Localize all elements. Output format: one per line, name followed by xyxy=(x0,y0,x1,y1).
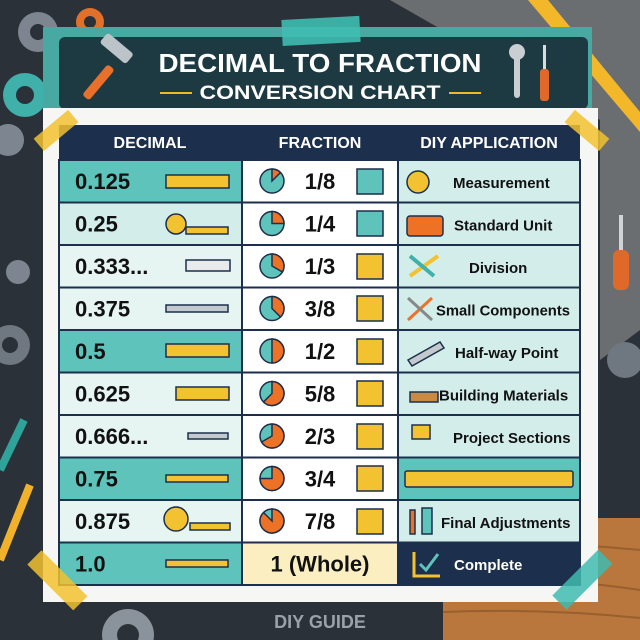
application labels: Final Adjustments xyxy=(441,515,570,532)
fractions: 1/4 xyxy=(305,212,336,236)
application labels: Small Components xyxy=(436,302,570,320)
pie charts xyxy=(260,169,284,533)
decimal values: 0.875 xyxy=(75,509,130,534)
title: DECIMAL TO FRACTION xyxy=(158,48,482,78)
decimal values: 0.333... xyxy=(75,254,148,279)
icon: wrench and screwdriver xyxy=(509,44,549,101)
decimal values: 0.5 xyxy=(75,339,106,364)
application labels: Division xyxy=(469,260,527,277)
application labels: Project Sections xyxy=(453,430,571,447)
table rows xyxy=(59,160,580,585)
decimal values: 0.75 xyxy=(75,466,118,492)
fractions xyxy=(270,169,370,576)
decimal values: 0.625 xyxy=(75,382,130,406)
application labels: Standard Unit xyxy=(454,218,552,234)
fractions: 1/3 xyxy=(305,254,335,279)
fractions: 2/3 xyxy=(305,424,335,449)
application icons xyxy=(405,171,573,576)
application labels: Complete xyxy=(454,557,522,574)
application labels xyxy=(436,175,571,574)
frame xyxy=(43,27,592,137)
tape: top xyxy=(281,16,361,46)
fraction square icons xyxy=(357,169,383,534)
table header: DECIMAL xyxy=(114,135,187,152)
title xyxy=(158,48,482,104)
decoration: tape measure ruler xyxy=(528,0,640,132)
decimal values xyxy=(75,169,148,576)
fractions: 3/4 xyxy=(305,466,336,492)
table header: DIY APPLICATION xyxy=(420,135,558,152)
application labels: Building Materials xyxy=(439,388,568,404)
decimal values: 0.666... xyxy=(75,424,148,449)
fractions: 1/2 xyxy=(305,339,335,364)
application labels: Measurement xyxy=(453,175,550,192)
tape: corners xyxy=(27,110,612,610)
table header: FRACTION xyxy=(279,135,361,152)
table header xyxy=(59,125,580,160)
decimal tool icons xyxy=(164,175,230,567)
decimal values: 1.0 xyxy=(75,552,106,576)
decimal values: 0.375 xyxy=(75,296,130,322)
decimal values: 0.25 xyxy=(75,212,118,236)
title: CONVERSION CHART xyxy=(200,83,441,104)
fractions: 1/8 xyxy=(305,169,335,194)
fractions: 3/8 xyxy=(305,296,335,322)
decoration: pencils xyxy=(0,420,30,560)
application labels: Half-way Point xyxy=(455,345,558,362)
icon: hammer xyxy=(82,32,134,101)
fractions: 5/8 xyxy=(305,382,335,406)
decoration: screwdriver xyxy=(613,215,629,290)
decimal values: 0.125 xyxy=(75,169,130,194)
paper xyxy=(43,108,598,602)
fractions: 1 (Whole) xyxy=(270,552,370,576)
footer: DIY GUIDE: DIY GUIDE xyxy=(274,612,366,632)
fractions: 7/8 xyxy=(305,509,335,534)
